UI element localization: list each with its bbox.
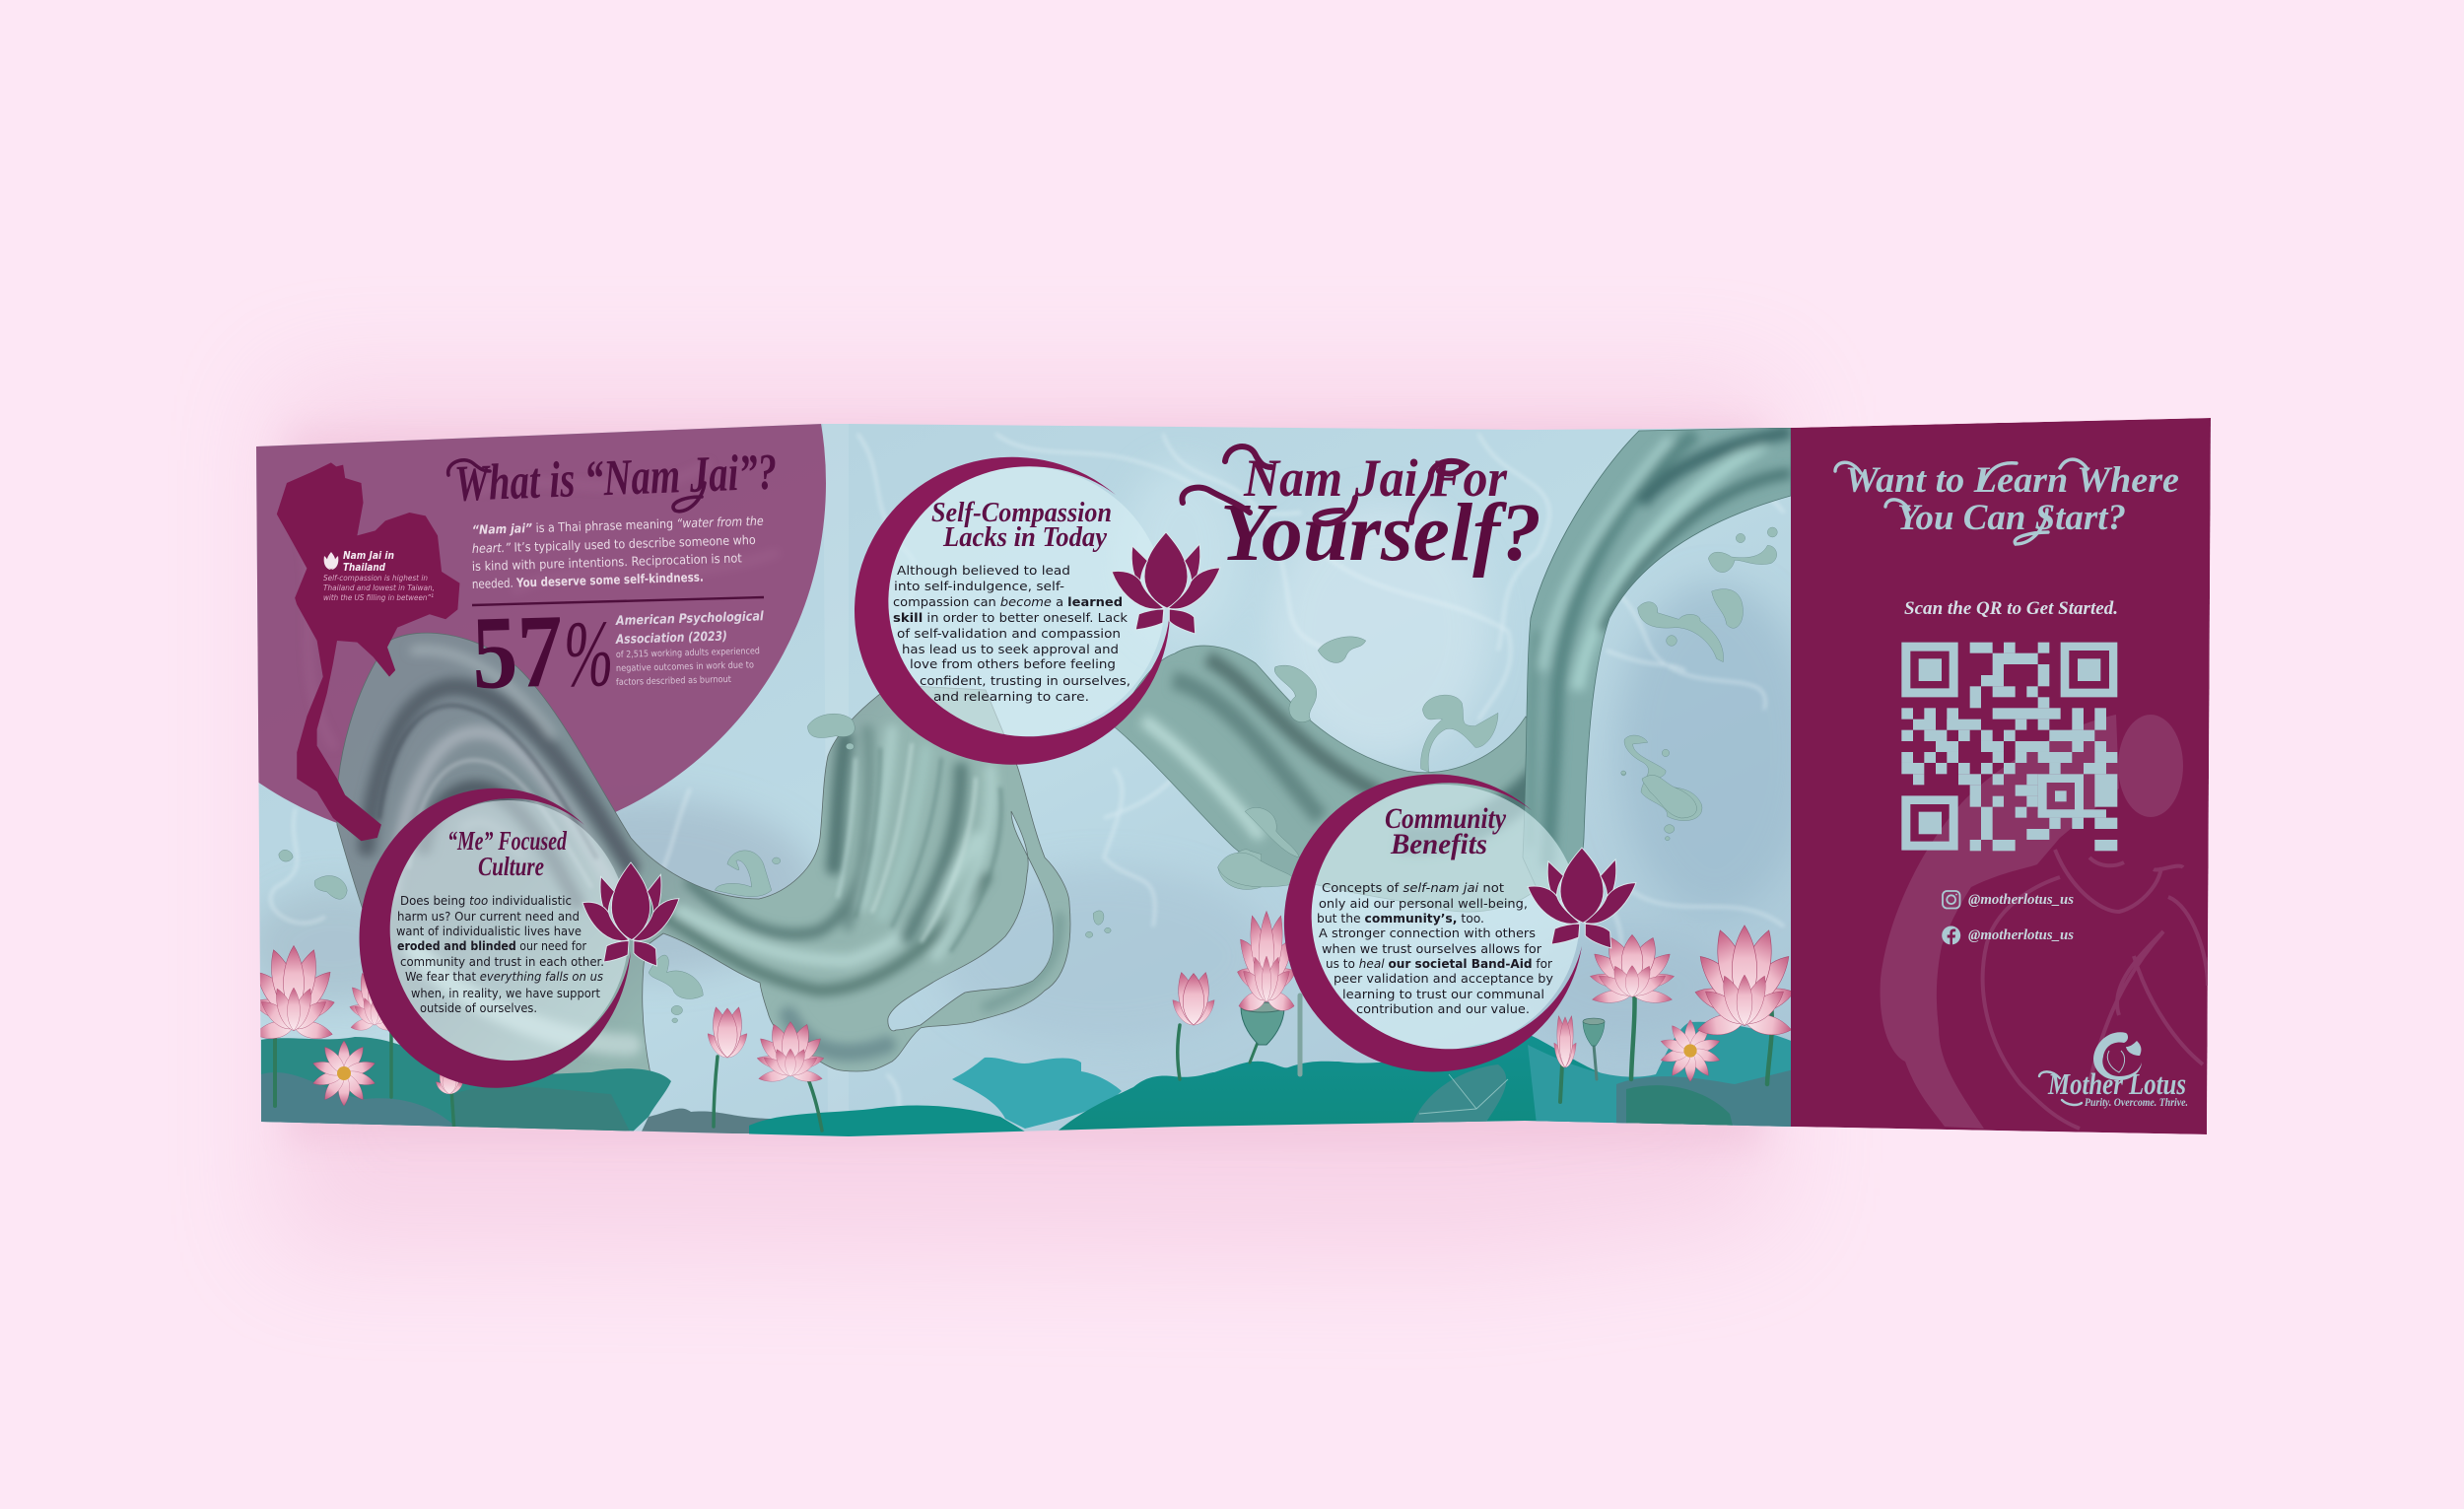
body text: A stronger connection with others	[1319, 926, 1536, 940]
map label: with the US filling in between”¹	[323, 592, 434, 602]
body text: when, in reality, we have support	[411, 987, 600, 1000]
logo icon	[2093, 1032, 2142, 1080]
logo: mother lotus: Mother Lotus	[2047, 1066, 2186, 1101]
heading: Lacks in Today	[942, 521, 1107, 553]
crescent frame	[360, 789, 631, 1088]
water soft patches	[246, 463, 1814, 1045]
body text: peer validation and acceptance by	[1334, 972, 1553, 986]
heading: want to learn: You Can Start?	[1897, 498, 2126, 538]
brochure artwork	[256, 424, 1791, 1136]
text: american psychological association: factors described as burnout	[616, 674, 731, 688]
heading: want to learn: Want to Learn Where	[1845, 460, 2179, 501]
body text: when we trust ourselves allows for	[1322, 942, 1541, 956]
map label	[323, 550, 435, 602]
body text	[893, 563, 1130, 704]
lily pads and leaves	[261, 1022, 1794, 1143]
icon: small lotus	[324, 552, 338, 570]
icon: instagram	[1943, 891, 1959, 909]
text: instagram handle: @motherlotus_us	[1968, 892, 2074, 908]
brochure shadow	[276, 384, 1774, 1262]
title swashes	[1182, 446, 1466, 523]
ribbon: middle band	[1114, 646, 1584, 912]
map label: Thailand	[343, 562, 385, 574]
body text: confident, trusting in ourselves,	[920, 673, 1130, 688]
logo: mother lotus	[2039, 1032, 2188, 1109]
heading: what is nam jai	[448, 444, 778, 513]
body text: harm us? Our current need and	[397, 910, 580, 924]
text: american psychological association: of 2,515 working adults experienced	[616, 646, 760, 660]
heading: Culture	[478, 852, 544, 881]
ribbon: left hump and central fan	[337, 633, 1070, 1074]
map label: Nam Jai in	[343, 550, 394, 562]
text: nam jai definition: needed. You deserve some self-kindness.	[472, 570, 704, 591]
body text: and relearning to care.	[933, 689, 1089, 704]
QR code	[1901, 643, 2117, 851]
text: nam jai definition: “Nam jai” is a Thai phrase meaning “water from the	[472, 514, 764, 537]
body text: skill in order to better oneself. Lack	[893, 610, 1129, 625]
panel: self-compassion circle	[855, 457, 1220, 765]
heading: Self-Compassion	[931, 497, 1112, 528]
panel: community benefits circle	[1284, 774, 1636, 1071]
body text: us to heal our societal Band-Aid for	[1326, 957, 1552, 971]
text: nam jai definition: heart.” It’s typically used to describe someone who	[472, 532, 756, 556]
body text: We fear that everything falls on us	[405, 970, 603, 984]
panel: purple back panel	[1791, 418, 2211, 1134]
icon: lotus ornament	[1112, 532, 1220, 634]
body text: has lead us to seek approval and	[902, 642, 1119, 656]
body text	[396, 894, 604, 1015]
heading: want to learn	[1835, 459, 2179, 544]
lotus flowers	[250, 911, 1797, 1133]
body text: learning to trust our communal	[1342, 988, 1544, 1001]
heading: Community	[1385, 802, 1507, 835]
map of Thailand	[277, 462, 459, 841]
fold shading	[823, 424, 849, 1136]
main title	[1182, 446, 1541, 579]
body text: but the community’s, too.	[1317, 912, 1484, 926]
body text: contribution and our value.	[1356, 1002, 1530, 1016]
body text: eroded and blinded our need for	[397, 939, 586, 953]
heading	[931, 497, 1112, 553]
body text: community and trust in each other.	[400, 955, 604, 969]
text: nam jai definition	[472, 514, 764, 591]
logo: mother lotus: Purity. Overcome. Thrive.	[2085, 1097, 2188, 1109]
body text: outside of ourselves.	[420, 1001, 537, 1015]
body text: love from others before feeling	[910, 656, 1116, 671]
text: nam jai definition: is kind with pure intentions. Reciprocation is not	[472, 550, 742, 574]
crescent frame	[855, 457, 1170, 765]
ribbon: right falling section	[1523, 428, 1791, 912]
crescent frame	[1284, 774, 1582, 1071]
heading	[1385, 802, 1507, 860]
water background	[246, 414, 1804, 1143]
text: american psychological association	[615, 609, 765, 688]
text: american psychological association: American Psychological	[615, 609, 765, 629]
main title: Nam Jai For	[1243, 448, 1508, 508]
heading	[447, 826, 567, 881]
icon: lotus ornament	[1528, 848, 1636, 948]
disk texture	[296, 463, 779, 749]
watermark: mother silhouette	[1881, 715, 2183, 1129]
body text: Although believed to lead	[897, 563, 1070, 578]
body text: into self-indulgence, self-	[894, 579, 1064, 593]
heading: “Me” Focused	[447, 826, 567, 856]
text: scan the QR: Scan the QR to Get Started.	[1904, 598, 2118, 619]
heading: Benefits	[1390, 828, 1487, 860]
heading: what is nam jai: What is “Nam Jai”?	[453, 444, 778, 513]
map label: Self-compassion is highest in	[323, 573, 428, 583]
main title: Yourself?	[1220, 487, 1541, 579]
text: american psychological association: negative outcomes in work due to	[616, 659, 754, 674]
water caustics	[271, 434, 1784, 1133]
text: facebook handle: @motherlotus_us	[1968, 927, 2074, 943]
body text: want of individualistic lives have	[396, 925, 582, 938]
map label: Thailand and lowest in Taiwan,	[323, 583, 435, 592]
text: american psychological association: Association (2023)	[615, 629, 727, 648]
body text: compassion can become a learned	[893, 594, 1123, 609]
statistic: 57 percent: 57	[471, 593, 565, 711]
body text: Does being too individualistic	[400, 894, 572, 908]
statistic: 57 percent: %	[563, 600, 615, 707]
icon: lotus ornament	[582, 862, 679, 966]
body text: only aid our personal well-being,	[1319, 897, 1528, 911]
water droplets	[279, 527, 1777, 1023]
panel: me focused culture circle	[360, 789, 679, 1088]
icon: facebook	[1942, 926, 1960, 944]
body text: Concepts of self-nam jai not	[1322, 881, 1504, 895]
body text: of self-validation and compassion	[897, 626, 1121, 641]
body text	[1317, 881, 1553, 1016]
panel: what is nam jai disk	[256, 424, 826, 823]
